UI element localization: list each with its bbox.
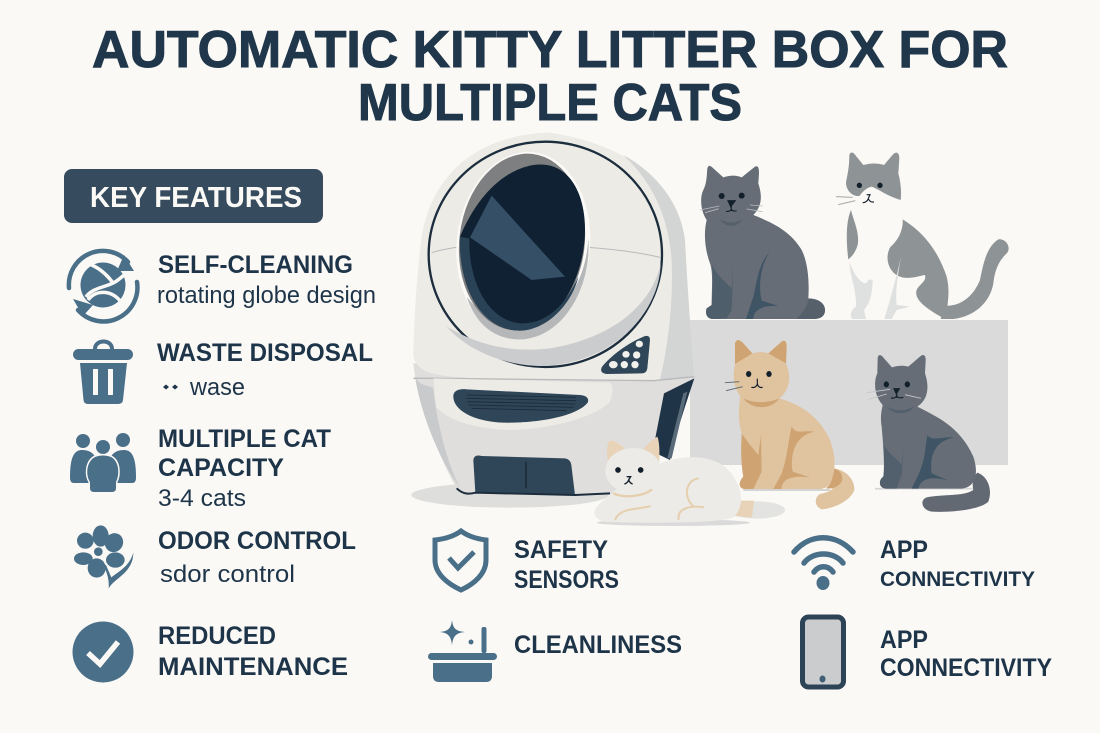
label: reduced maintenance: REDUCED xyxy=(158,622,276,650)
cat: bottom-left tan xyxy=(725,340,854,509)
feature: odor control xyxy=(74,525,356,589)
platform behind cats xyxy=(690,320,1008,465)
front collar xyxy=(433,378,613,430)
feature: multiple cat capacity xyxy=(70,425,331,512)
globe seams xyxy=(432,247,660,257)
globe lower shade xyxy=(447,263,661,366)
label: app connectivity: APP xyxy=(880,536,928,564)
label: safety sensors: SENSORS xyxy=(514,566,619,594)
heading: key features: KEY FEATURES xyxy=(90,182,302,214)
litter robot illustration xyxy=(411,133,694,508)
label: multiple cat capacity: CAPACITY xyxy=(158,454,284,482)
cat: top-right grey and white xyxy=(836,153,1009,319)
description: sdor control: sdor control xyxy=(160,561,295,588)
label: safety sensors: SAFETY xyxy=(514,536,608,564)
floor shadow xyxy=(411,482,609,508)
label: reduced maintenance: MAINTENANCE xyxy=(158,653,348,681)
label: multiple cat capacity: MULTIPLE CAT xyxy=(158,425,331,453)
label: app connectivity: CONNECTIVITY xyxy=(880,568,1035,591)
waste drawer xyxy=(473,455,575,495)
icon: smartphone xyxy=(802,617,844,687)
icon: wifi xyxy=(794,538,853,590)
icon: rotating globe xyxy=(69,251,137,321)
cat: top-left grey xyxy=(700,166,825,319)
housing side shade xyxy=(623,155,694,380)
heading: key features xyxy=(64,169,323,223)
label: waste disposal: WASTE DISPOSAL xyxy=(157,339,373,367)
icon: trash bin xyxy=(73,342,133,404)
feature: cleanliness xyxy=(428,620,682,682)
label: app connectivity xyxy=(880,536,1035,591)
description: wase: wase xyxy=(189,374,245,401)
housing waistline xyxy=(413,377,694,381)
feature: self-cleaning xyxy=(69,251,376,321)
title xyxy=(92,21,1008,132)
icon: shield xyxy=(435,531,486,590)
feature: app connectivity (phone) xyxy=(802,617,1052,687)
label: cleanliness: CLEANLINESS xyxy=(514,631,682,659)
side dark panel xyxy=(653,378,694,460)
feature: app connectivity (wifi) xyxy=(794,536,1035,591)
label: multiple cat capacity xyxy=(158,425,331,482)
upper housing xyxy=(413,133,694,380)
icon: check circle xyxy=(72,622,134,682)
label: safety sensors xyxy=(514,536,619,594)
icon: flower xyxy=(74,525,133,589)
label: reduced maintenance xyxy=(158,622,348,681)
lower body xyxy=(413,360,694,495)
feature: waste disposal xyxy=(73,339,373,404)
cat: white lying in front xyxy=(595,437,785,526)
label: app connectivity: CONNECTIVITY xyxy=(880,654,1052,682)
icon: basin with sparkle xyxy=(428,620,497,682)
title: MULTIPLE CATS xyxy=(358,74,742,132)
globe xyxy=(429,142,662,367)
label: odor control: ODOR CONTROL xyxy=(158,527,356,555)
label: self-cleaning: SELF-CLEANING xyxy=(158,251,353,279)
feature: reduced maintenance xyxy=(72,622,348,682)
front vent xyxy=(453,389,588,423)
title: AUTOMATIC KITTY LITTER BOX FOR xyxy=(92,21,1008,79)
label: app connectivity: APP xyxy=(880,626,928,654)
feature: safety sensors xyxy=(435,531,619,594)
label: app connectivity xyxy=(880,626,1052,682)
opening xyxy=(447,145,599,345)
description: rotating globe design: rotating globe design xyxy=(157,282,376,309)
description: wase xyxy=(163,374,245,401)
description: 3-4 cats: 3-4 cats xyxy=(158,485,246,512)
control panel xyxy=(601,336,650,374)
cat: bottom-right grey xyxy=(867,355,990,512)
icon: group of cats xyxy=(70,433,136,492)
